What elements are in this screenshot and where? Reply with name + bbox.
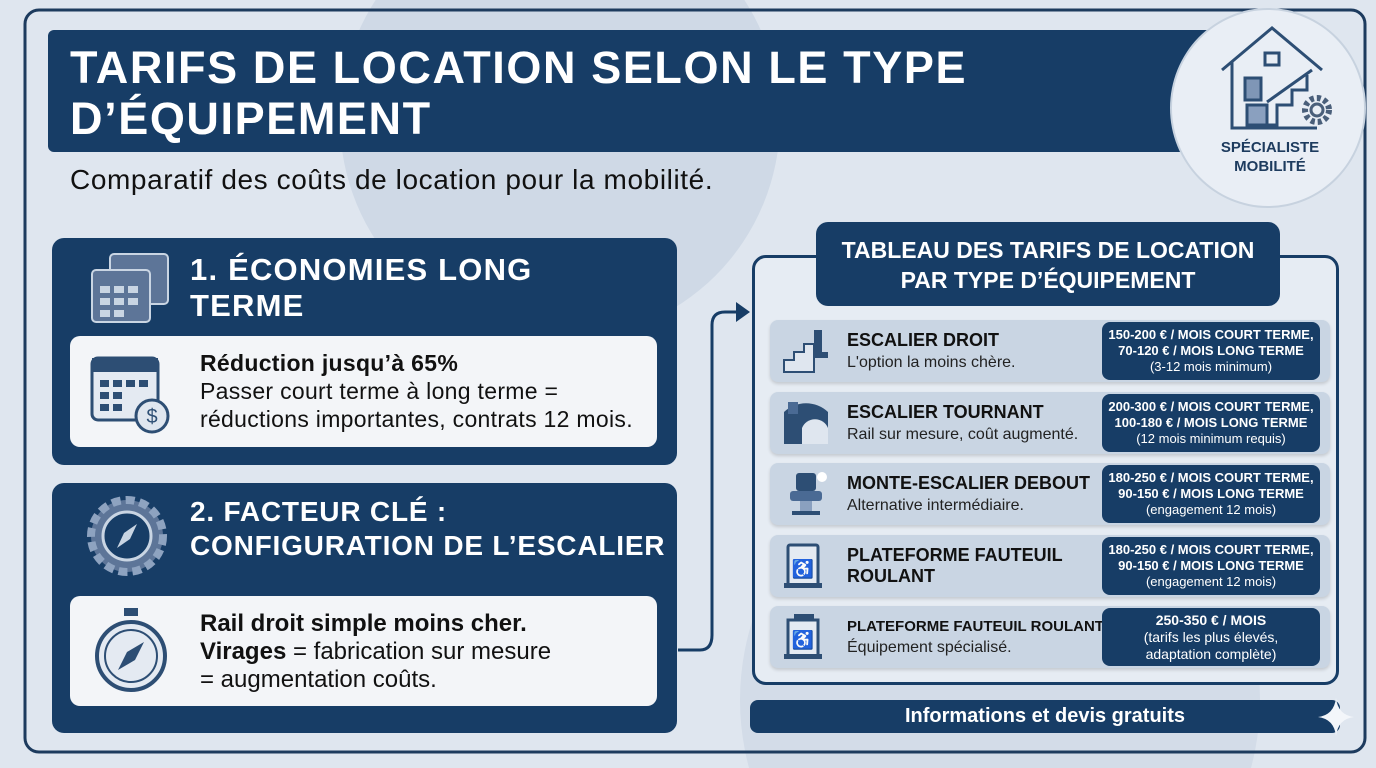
row: monte-escalier debout: 90-150 € / MOIS LONG TERME [1118,486,1304,501]
icon: gear compass [87,496,167,576]
row: plateforme fauteuil roulant: ♿ [792,558,814,579]
row: monte-escalier debout: 180-250 € / MOIS COURT TERME, [1108,470,1314,485]
row: plateforme spécialisée: ♿ [792,629,814,650]
row: plateforme fauteuil roulant: 90-150 € / MOIS LONG TERME [1118,558,1304,573]
heading 2: CONFIGURATION DE L’ESCALIER [190,530,665,561]
row: plateforme fauteuil roulant: PLATEFORME FAUTEUIL [847,545,1063,565]
heading 2: 2. FACTEUR CLÉ : [190,496,447,527]
row: plateforme spécialisée: 250-350 € / MOIS [1156,612,1266,628]
badge: spécialiste mobilité: SPÉCIALISTE [1221,139,1319,156]
row: escalier droit: ESCALIER DROIT [847,330,999,350]
row: escalier droit: L'option la moins chère. [847,354,1015,371]
heading 1 [190,252,532,323]
callout: réduction: Passer court terme à long terme = [200,378,558,404]
callout: rail droit [70,596,657,706]
title banner: D’ÉQUIPEMENT [70,93,432,144]
table heading tab: PAR TYPE D’ÉQUIPEMENT [901,267,1195,293]
icon: sparkle [1318,699,1353,735]
table heading tab [816,222,1280,306]
row: monte-escalier debout: Alternative intermédiaire. [847,497,1024,514]
row: plateforme fauteuil roulant: 180-250 € / MOIS COURT TERME, [1108,542,1314,557]
row: monte-escalier debout: MONTE-ESCALIER DEBOUT [847,473,1090,493]
row: escalier droit: 150-200 € / MOIS COURT TERME, [1108,327,1314,342]
callout: réduction: réductions importantes, contrats 12 mois. [200,406,633,432]
callout: réduction: Réduction jusqu’à 65% [200,350,458,376]
row: plateforme spécialisée: (tarifs les plus élevés, [1144,629,1278,645]
row: monte-escalier debout: (engagement 12 mois) [1146,502,1276,517]
heading 1: TERME [190,288,304,323]
row: monte-escalier debout [770,463,1330,525]
heading 1: 1. ÉCONOMIES LONG [190,252,532,287]
icon: calendars [91,253,169,323]
badge: spécialiste mobilité [1170,8,1366,208]
row: escalier tournant [770,392,1330,454]
title banner: TARIFS DE LOCATION SELON LE TYPE [70,42,967,93]
callout: réduction: $ [146,406,158,428]
row: plateforme fauteuil roulant [770,535,1330,597]
row: plateforme fauteuil roulant: ROULANT [847,566,935,586]
row: plateforme spécialisée: Équipement spécialisé. [847,639,1012,656]
row: escalier droit [770,320,1330,382]
row: plateforme spécialisée: PLATEFORME FAUTEUIL ROULANT [847,618,1104,635]
heading 2 [190,496,665,561]
row: escalier tournant: Rail sur mesure, coût augmenté. [847,426,1078,443]
row: plateforme fauteuil roulant: (engagement 12 mois) [1146,574,1276,589]
panel: tableau des tarifs [752,255,1339,685]
row: plateforme spécialisée [770,606,1330,668]
callout: rail droit: Virages = fabrication sur mesure [200,638,551,665]
footer bar [750,700,1340,733]
title banner [48,30,1238,152]
row: escalier tournant: (12 mois minimum requis) [1136,431,1286,446]
row: escalier tournant: 200-300 € / MOIS COURT TERME, [1108,399,1314,414]
footer bar: Informations et devis gratuits [905,705,1185,727]
row: escalier droit: (3-12 mois minimum) [1150,359,1272,374]
row: escalier tournant: ESCALIER TOURNANT [847,402,1044,422]
panel 1: économies long terme [52,238,677,465]
row: escalier droit: 70-120 € / MOIS LONG TERME [1118,343,1304,358]
badge: spécialiste mobilité: MOBILITÉ [1234,158,1306,175]
subtitle: Comparatif des coûts de location pour la mobilité. [70,164,713,195]
panel 2: facteur clé [52,483,677,733]
arrow connector [678,302,750,652]
callout: rail droit: Rail droit simple moins cher. [200,610,527,637]
callout: réduction [70,336,657,447]
row: plateforme spécialisée: adaptation complète) [1146,646,1276,662]
row: escalier tournant: 100-180 € / MOIS LONG TERME [1115,415,1307,430]
callout: rail droit: = augmentation coûts. [200,666,437,693]
table heading tab: TABLEAU DES TARIFS DE LOCATION [842,237,1254,263]
